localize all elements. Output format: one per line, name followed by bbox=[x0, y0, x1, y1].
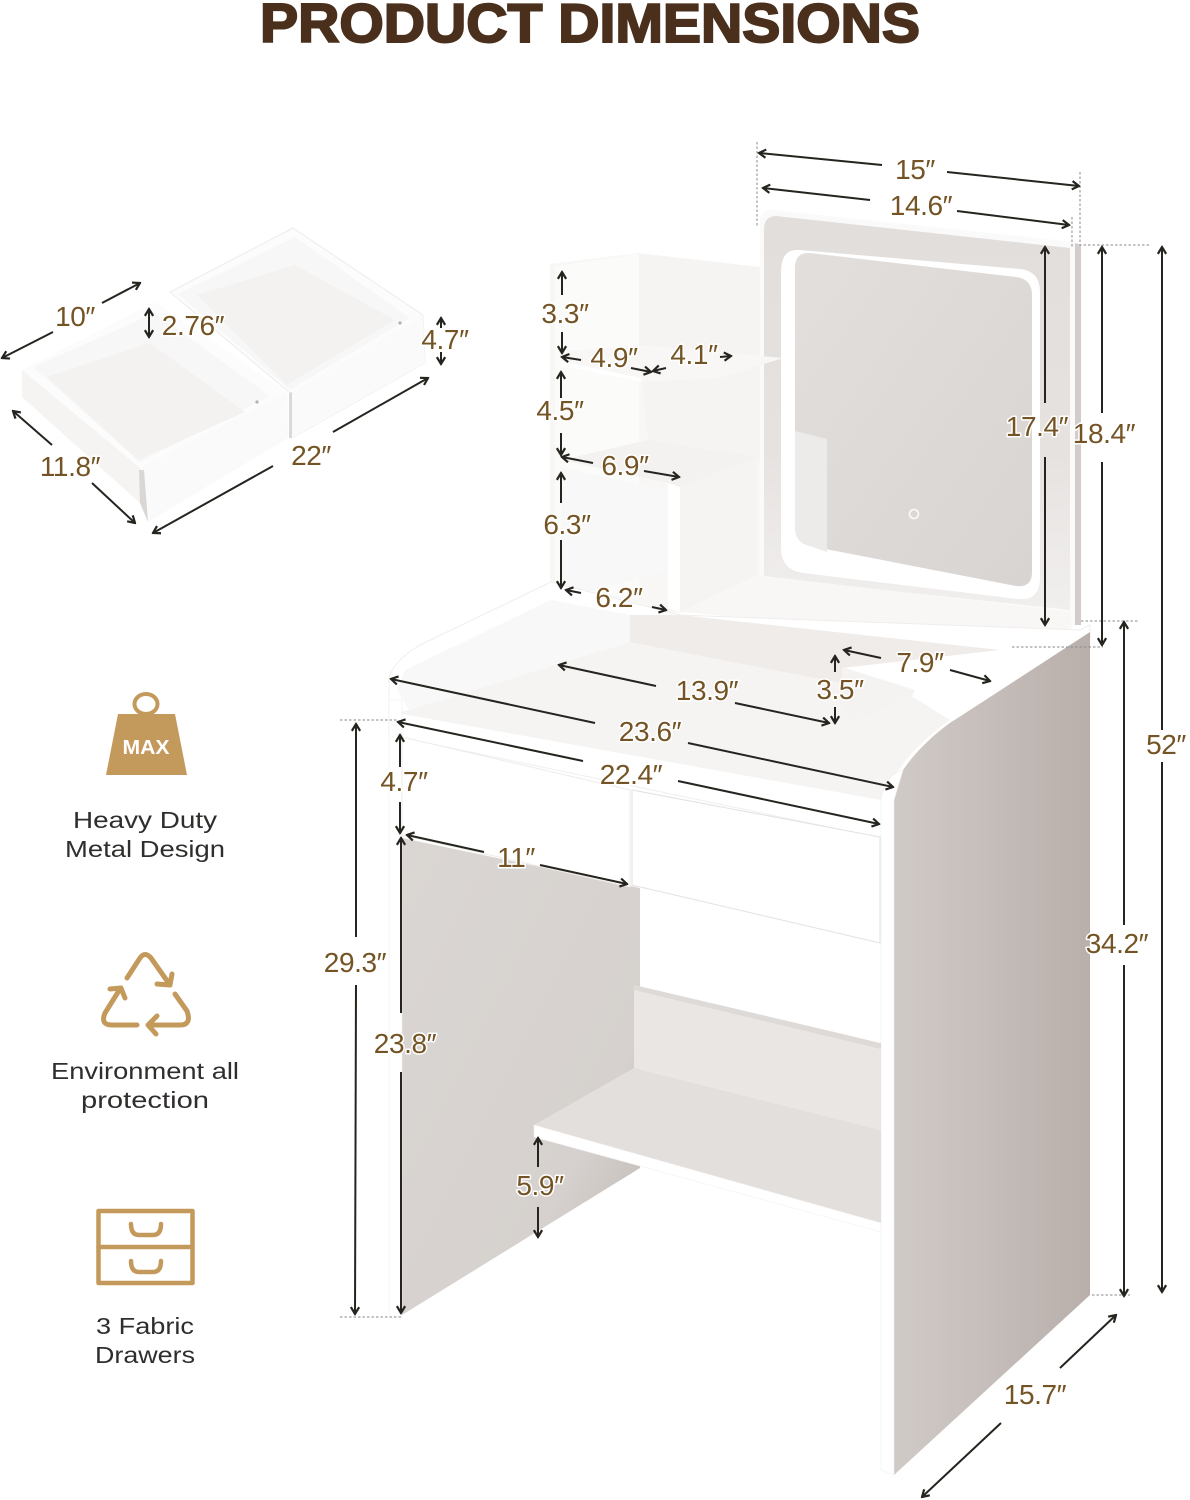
hutch shelves bbox=[550, 253, 1072, 640]
label: heavy duty metal design: Heavy Duty bbox=[73, 807, 218, 833]
dimension: drawer front 4.7 in: 4.7″ bbox=[380, 766, 428, 797]
mirror bbox=[760, 210, 1081, 625]
right side panel bbox=[881, 632, 1090, 1475]
icon: drawers bbox=[98, 1211, 192, 1283]
dimension: 6.3 in: 6.3″ bbox=[543, 509, 591, 540]
mirror touch button bbox=[910, 510, 918, 518]
dimension: drawer 4.7 in bbox=[421, 318, 469, 364]
dimension: 15 in: 15″ bbox=[895, 154, 935, 185]
vanity desk illustration bbox=[389, 210, 1090, 1475]
icon: weight MAX bbox=[106, 694, 187, 775]
dimension: 18.4 in: 18.4″ bbox=[1073, 418, 1136, 449]
dimension: 3.5 in bbox=[816, 656, 864, 723]
dimension: 3.5 in: 3.5″ bbox=[816, 674, 864, 705]
dimension: 4.1 in bbox=[653, 339, 731, 371]
dimension: 14.6 in: 14.6″ bbox=[890, 190, 953, 221]
drawer fronts bbox=[402, 737, 880, 943]
dimension: 22.4 in bbox=[398, 722, 879, 824]
dimension: 23.8 in: 23.8″ bbox=[374, 1028, 437, 1059]
dimension: 13.9 in: 13.9″ bbox=[676, 675, 739, 706]
desk top bbox=[389, 582, 1090, 838]
icon: weight MAX: MAX bbox=[122, 737, 170, 759]
label: 3 fabric drawers: Drawers bbox=[95, 1342, 195, 1368]
dimension: 6.9 in: 6.9″ bbox=[601, 450, 649, 481]
label: heavy duty metal design bbox=[65, 807, 225, 862]
label: 3 fabric drawers: 3 Fabric bbox=[96, 1313, 194, 1339]
left drawer bbox=[22, 302, 288, 522]
dimension: 15.7 in: 15.7″ bbox=[1004, 1379, 1067, 1410]
dimension: 4.5 in bbox=[536, 372, 584, 455]
dimension: 6.3 in bbox=[543, 473, 591, 588]
dimension: 14.6 in bbox=[763, 188, 1069, 225]
dimension: drawer 11.8 in: 11.8″ bbox=[40, 451, 101, 482]
dimension: drawer 2.76 in: 2.76″ bbox=[162, 310, 225, 341]
open space under drawers bbox=[640, 890, 880, 1043]
dimension: 3.3 in bbox=[541, 272, 589, 353]
dimension: 29.3 in: 29.3″ bbox=[324, 947, 387, 978]
dimension: 6.2 in: 6.2″ bbox=[595, 582, 643, 613]
dimension: drawer 22 in bbox=[153, 378, 428, 533]
dimension: 7.9 in bbox=[844, 647, 990, 681]
dimension: 4.1 in: 4.1″ bbox=[670, 339, 718, 370]
feature: heavy duty bbox=[65, 694, 225, 862]
feature: environment bbox=[51, 954, 239, 1113]
dimension: 4.9 in: 4.9″ bbox=[590, 342, 638, 373]
dimension: 6.2 in bbox=[566, 582, 666, 613]
dimension: 5.9 in: 5.9″ bbox=[516, 1170, 564, 1201]
dimension: 15.7 in bbox=[922, 1315, 1116, 1497]
dimension: 13.9 in bbox=[559, 665, 829, 723]
dimension: 22.4 in: 22.4″ bbox=[600, 759, 663, 790]
dimension: 17.4 in: 17.4″ bbox=[1006, 411, 1069, 442]
feature: drawers bbox=[95, 1211, 195, 1368]
right drawer bbox=[170, 228, 425, 438]
dimension: 23.6 in bbox=[391, 679, 893, 787]
drawers illustration bbox=[22, 228, 425, 522]
dimension: 34.2 in: 34.2″ bbox=[1086, 928, 1149, 959]
dimension: drawer 4.7 in: 4.7″ bbox=[421, 324, 469, 355]
lower shelf bbox=[534, 985, 881, 1232]
dimension: 11 in bbox=[407, 835, 627, 884]
label: 3 fabric drawers bbox=[95, 1313, 195, 1368]
label: environment all protection bbox=[51, 1058, 239, 1113]
icon: recycle bbox=[104, 954, 188, 1034]
dimension: drawer front 4.7 in bbox=[380, 735, 428, 833]
dimension: 15 in bbox=[759, 153, 1079, 186]
dimension: drawer 11.8 in bbox=[13, 411, 135, 523]
dimension: 11 in: 11″ bbox=[497, 842, 535, 873]
dimension: 6.9 in bbox=[562, 450, 679, 481]
dimension: 52 in: 52″ bbox=[1146, 729, 1186, 760]
label: heavy duty metal design: Metal Design bbox=[65, 836, 225, 862]
dimension: drawer 10 in: 10″ bbox=[55, 301, 95, 332]
left leg panel bbox=[389, 700, 640, 1317]
dimension: drawer 10 in bbox=[2, 283, 140, 358]
dimension: 4.5 in: 4.5″ bbox=[536, 395, 584, 426]
dashed guide lines bbox=[340, 142, 1150, 1317]
dimension: drawer 22 in: 22″ bbox=[291, 440, 331, 471]
dimension: 5.9 in bbox=[516, 1138, 564, 1237]
label: environment all protection: protection bbox=[81, 1087, 209, 1113]
dimension: 3.3 in: 3.3″ bbox=[541, 298, 589, 329]
dimension: 23.6 in: 23.6″ bbox=[619, 716, 682, 747]
dimension: 7.9 in: 7.9″ bbox=[896, 647, 944, 678]
dimension: 4.9 in bbox=[562, 342, 651, 373]
label: environment all protection: Environment all bbox=[51, 1058, 239, 1084]
